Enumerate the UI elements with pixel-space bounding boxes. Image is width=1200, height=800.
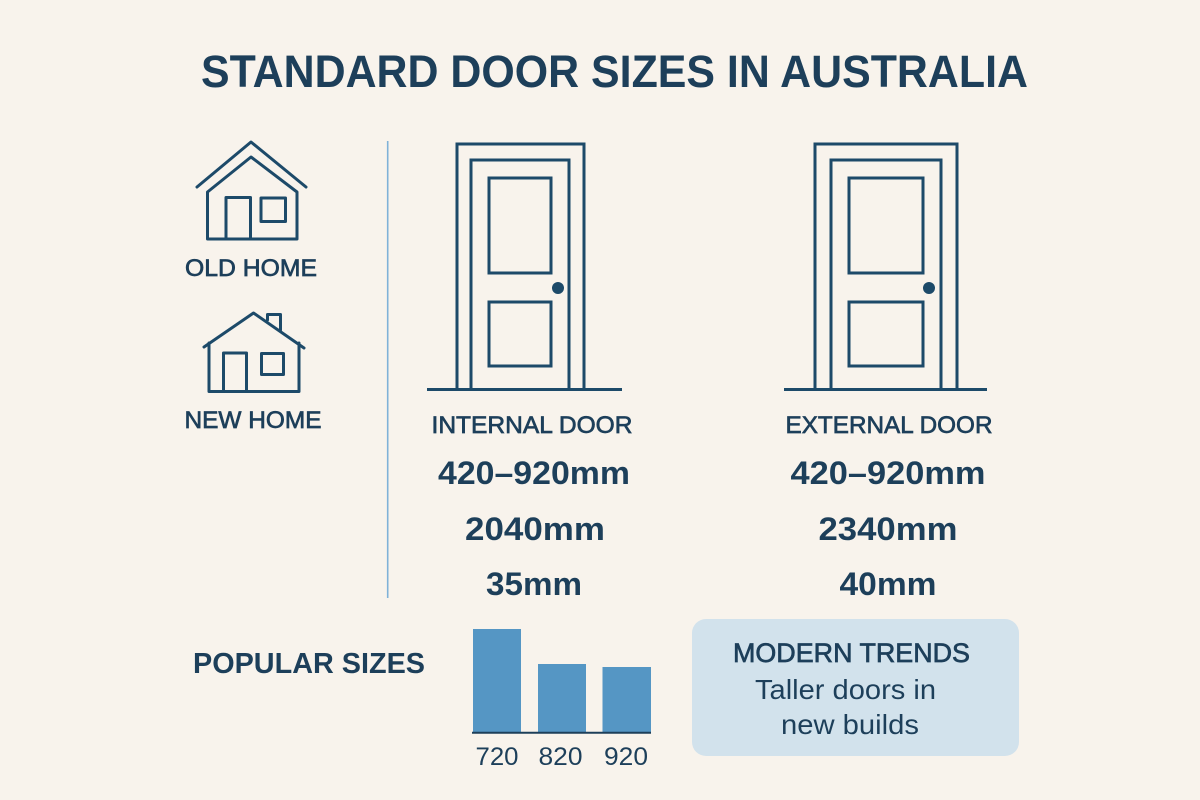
heading: internal door: INTERNAL DOOR [432,412,632,439]
bar chart: 720 [476,743,518,771]
icon: old home [197,142,306,239]
heading: external door: EXTERNAL DOOR [786,412,992,439]
bar chart: 920 [604,743,648,771]
external width: 420–920mm [790,455,986,491]
external thickness: 40mm [840,566,936,602]
panel: external door [784,144,992,602]
internal thickness: 35mm [486,566,582,602]
internal width: 420–920mm [438,455,630,491]
label: old home: OLD HOME [185,255,317,282]
internal height: 2040mm [465,511,605,547]
bar chart [472,629,651,771]
callout: modern trends: MODERN TRENDS [733,638,970,668]
bar chart: 820 [538,743,582,771]
icon: external door [784,144,987,390]
divider line [387,141,389,598]
icon: internal door [427,144,622,390]
title: STANDARD DOOR SIZES IN AUSTRALIA [201,46,1028,97]
label: new home: NEW HOME [184,407,322,434]
callout: modern trends [692,619,1019,756]
callout: modern trends: Taller doors in [755,674,936,705]
external height: 2340mm [818,511,958,547]
panel: home types [184,142,322,434]
icon: new home [204,313,304,392]
heading: popular sizes: POPULAR SIZES [193,648,425,680]
panel: internal door [427,144,632,602]
callout: modern trends: new builds [781,709,919,740]
